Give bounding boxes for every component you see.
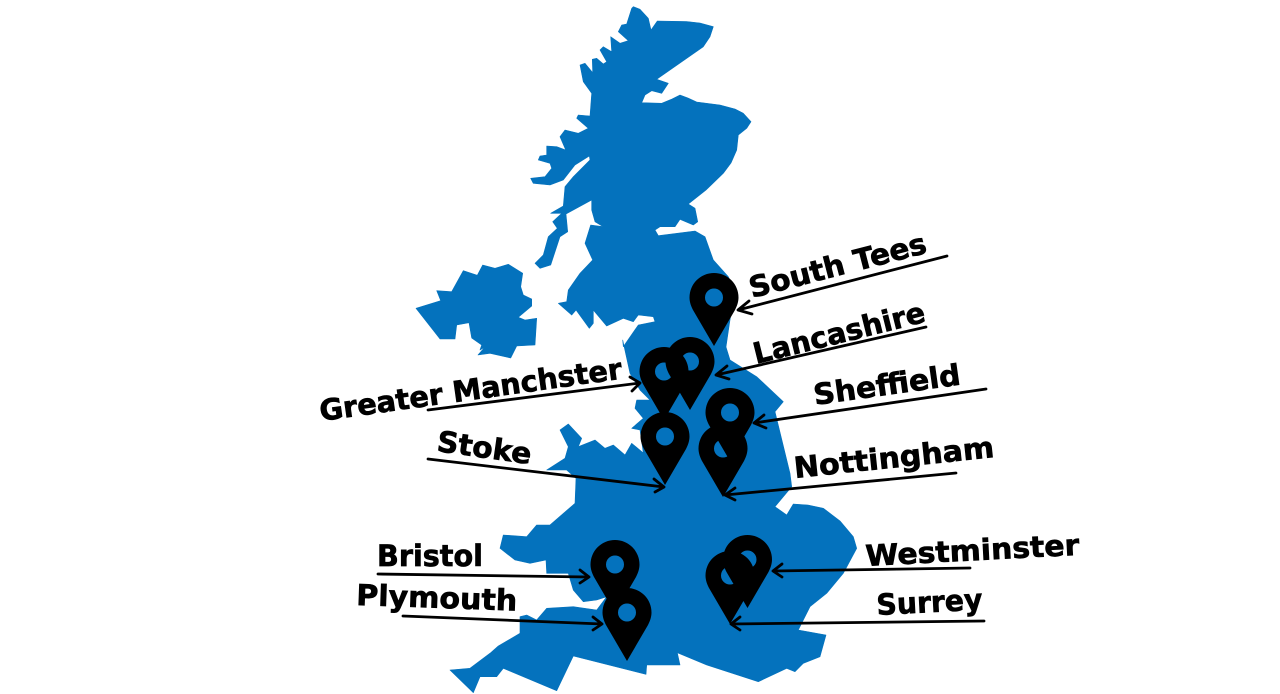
label: Plymouth xyxy=(356,578,602,630)
pin: Greater Manchster xyxy=(640,347,688,420)
label: Nottingham: Nottingham xyxy=(792,430,996,485)
label: Sheffield: Sheffield xyxy=(811,358,963,412)
label: Plymouth: Plymouth xyxy=(356,578,518,618)
label: South Tees: South Tees xyxy=(745,226,930,305)
pin: Bristol xyxy=(590,540,640,613)
pin: Nottingham xyxy=(698,424,748,497)
pin: Sheffield xyxy=(706,388,754,461)
label: Stoke: Stoke xyxy=(435,424,534,471)
label: Lancashire: Lancashire xyxy=(749,295,928,371)
pin: Lancashire xyxy=(666,337,714,410)
label: Bristol xyxy=(377,539,589,583)
map: Great Britain xyxy=(450,7,857,693)
label: Surrey xyxy=(731,582,984,630)
label: Stoke xyxy=(428,424,664,492)
pin: Stoke xyxy=(640,412,690,485)
label: Nottingham xyxy=(725,430,996,500)
label: Greater Manchster: Greater Manchster xyxy=(317,352,625,428)
pin: Plymouth xyxy=(602,588,652,661)
pin: Westminster xyxy=(723,535,772,608)
label: Westminster: Westminster xyxy=(865,528,1081,573)
pin: Surrey xyxy=(706,551,754,624)
map: Northern Ireland xyxy=(416,264,537,358)
label: Westminster xyxy=(773,528,1081,577)
pin: South Tees xyxy=(690,273,738,346)
label: Bristol: Bristol xyxy=(377,539,483,573)
label: Surrey: Surrey xyxy=(876,582,983,622)
label: Sheffield xyxy=(754,358,986,428)
